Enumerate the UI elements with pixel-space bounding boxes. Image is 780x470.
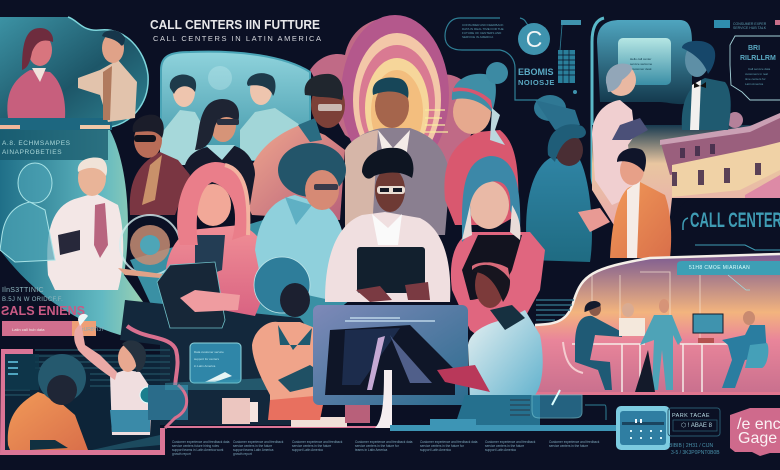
pink label strip: Latin call hub data <box>12 327 45 332</box>
box props <box>222 398 370 427</box>
text: left block: IlnS3TTINIC <box>2 287 44 294</box>
HUD text block: DATA IN REAL TIME FOR THE <box>462 27 504 31</box>
pink label strip <box>2 321 104 336</box>
figure: man left in monitor <box>160 74 205 165</box>
speech bubble <box>618 38 671 85</box>
desk monitor <box>92 385 188 450</box>
figure: seated man right <box>722 311 768 388</box>
figure: woman with glasses in dark suit <box>185 99 255 205</box>
HUD text block: SERVICE IN AMERICA <box>462 35 493 39</box>
figure: orange person <box>8 354 88 450</box>
figure: man right in monitor <box>240 73 300 160</box>
panel: top centre HUD <box>445 18 581 100</box>
column 2: Customer experience and feedback <box>233 440 284 444</box>
HUD grid table <box>558 20 581 94</box>
HUD text block: CONSUMER AND FEEDBACK <box>462 23 504 27</box>
column 4: service centers in the future for <box>355 444 400 448</box>
table right <box>680 344 735 392</box>
HUD label text: EBOMIS <box>518 67 554 77</box>
tablet <box>356 247 430 302</box>
HUD text block: FUTURE OF CENTERS AND <box>462 31 502 35</box>
figure: woman in pink jacket <box>7 28 65 118</box>
figure: blonde woman in pink jacket <box>165 162 270 316</box>
front building <box>672 142 780 198</box>
monitor on right table <box>693 314 723 343</box>
small blue caption: 3-5 / 3K3P0PNT0B0B <box>671 450 720 456</box>
column 1: support teams in Latin America work <box>172 448 224 452</box>
column 1: Customer experience and feedback data <box>172 440 230 444</box>
central monitor back <box>313 305 468 428</box>
table left <box>572 344 645 392</box>
column 6 <box>485 440 536 452</box>
column 3 <box>292 440 343 452</box>
hologram cup <box>532 390 606 420</box>
speech bubble: Hello call center <box>630 57 651 61</box>
panel: left teal gradient <box>0 130 170 340</box>
panel: bottom-left work room <box>0 314 390 455</box>
HUD label text: NOIOSJE <box>518 78 555 87</box>
figure: man in orange jacket <box>610 148 671 258</box>
panel: top right HUD: BRI <box>748 45 760 52</box>
column 1: growth report <box>172 452 191 456</box>
panel: top right HUD: Call service data <box>748 67 771 71</box>
text: left heading: A.8. ECHMSAMPES <box>2 140 71 147</box>
panel: top right HUD: RILRLLRM <box>740 55 776 62</box>
title: CALL CENTERS IIN FUTTURE <box>150 18 320 32</box>
back building <box>660 112 780 175</box>
column 4: Customer experience and feedback data <box>355 440 413 444</box>
column 2: support teams Latin America <box>233 448 274 452</box>
column 6: service centers in the future <box>485 444 524 448</box>
panel: top right HUD: Latin America <box>745 82 764 86</box>
panel: city buildings <box>592 112 780 235</box>
panel: left teal gradient: AINAPROBETIES <box>2 149 62 156</box>
column 1 <box>172 440 230 456</box>
bottom teal line <box>390 419 620 431</box>
figure: man with glasses and peach jacket <box>245 74 345 220</box>
panel: top right HUD: SERVICE HUB TALK <box>733 26 767 30</box>
HUD label text <box>518 67 555 87</box>
pink label strip: rUR8YI3T <box>82 327 104 333</box>
figure: seated man in white shirt <box>619 303 645 336</box>
meeting room label: 51H8 CMOE MIARIAAN <box>689 265 750 271</box>
pink connector <box>165 385 187 428</box>
meeting room label <box>677 261 780 290</box>
figure: man in beige shirt <box>78 30 137 122</box>
panel: lower right strip stripes <box>536 300 574 320</box>
figure: woman in beanie and pink sweater <box>444 62 518 225</box>
figure: man raising arm <box>74 314 156 435</box>
figure: person with bun in blue sweater <box>526 95 610 262</box>
figure: woman with blue hair and black top <box>451 156 545 345</box>
text: left block <box>1 287 85 318</box>
column 7: service centers in the future <box>549 444 588 448</box>
column 7 <box>549 440 600 448</box>
monitor stand <box>375 370 420 428</box>
speech bubble: customer desk <box>632 67 652 71</box>
hologram message box: Data customer service <box>194 350 224 354</box>
column 7: Customer experience and feedback <box>549 440 600 444</box>
text: left block: ƧALS ENIENS <box>1 303 85 318</box>
panel: top right HUD: CONSUMER EXPER <box>733 22 767 26</box>
panel: top right HUD: time centers for <box>745 77 766 81</box>
panel: pink concentric arcs <box>310 15 478 200</box>
panel: central background blue <box>130 200 350 345</box>
figure: man in tuxedo <box>682 41 731 130</box>
ribbon <box>127 326 178 390</box>
panel: central monitor <box>161 52 310 160</box>
pink badge <box>730 408 780 456</box>
panel: top-left meeting <box>0 17 148 130</box>
hand over tablet <box>180 290 240 312</box>
speech bubble: service welcome <box>630 62 653 66</box>
figure: afro person <box>252 257 328 420</box>
device: calendar tablet <box>616 406 670 450</box>
column 5: Customer experience and feedback data <box>420 440 478 444</box>
text: left block: B.5J N W ORIDCF.F. <box>2 297 63 303</box>
column 2: growth report <box>233 452 252 456</box>
pink badge: Gage <box>738 430 777 447</box>
title <box>150 18 321 43</box>
outlined label: ⬡ ! ABAE 8 <box>681 422 713 429</box>
hologram message box: support for centers <box>194 357 220 361</box>
column 6: Customer experience and feedback <box>485 440 536 444</box>
figure: hologram globe <box>118 215 180 278</box>
strip of blocks under the meeting <box>0 118 112 130</box>
icon: C badge: C <box>526 26 542 52</box>
panel: top right HUD <box>714 20 780 100</box>
stripes block <box>510 400 530 415</box>
pink badge: /e enc <box>737 416 780 433</box>
figure: man in white shirt and tie <box>47 158 123 290</box>
figure: central man in grey jacket <box>345 78 450 235</box>
figure: standing woman in teal <box>635 299 682 392</box>
small blue caption <box>669 443 720 456</box>
figure: tablet held by blonde woman <box>157 262 225 328</box>
figure: man in sunglasses with tablet <box>325 148 450 302</box>
outlined label <box>668 408 720 436</box>
bottom text columns <box>172 440 600 456</box>
outlined label: PARK TACAE <box>672 413 710 419</box>
column 6: support Latin America <box>485 448 516 452</box>
HUD text block <box>462 23 504 39</box>
hologram message box <box>190 343 241 383</box>
panel: CALL CENTER label <box>672 198 780 250</box>
column 4 <box>355 440 413 452</box>
central lower background <box>120 300 313 425</box>
figure: man in white-blue coat <box>437 262 543 425</box>
figure: man in sunglasses and maroon jacket <box>130 115 190 215</box>
figure: old woman in pink dress <box>592 64 648 205</box>
figure: seated man <box>563 302 622 390</box>
column 2: service centers in the future <box>233 444 272 448</box>
small blue caption: BIBIB | 2H31 / CIJN <box>669 443 713 449</box>
column 5: service centers in the future for <box>420 444 465 448</box>
panel: right teal with speech bubble <box>592 18 692 210</box>
hologram message box: in Latin America <box>194 364 216 368</box>
column 3: support Latin America <box>292 448 323 452</box>
title: CALL CENTERS IN LATIN AMERICA <box>153 34 321 43</box>
panel: meeting room <box>535 254 780 395</box>
column 2 <box>233 440 284 456</box>
column 3: Customer experience and feedback <box>292 440 343 444</box>
figure: hologram man <box>0 163 55 262</box>
panel: top right HUD: customers in real <box>745 72 768 76</box>
glow strip <box>165 375 330 390</box>
column 3: service centers in the future <box>292 444 331 448</box>
figure: curly haired woman with glasses <box>255 143 346 300</box>
column 4: teams in Latin America <box>355 448 387 452</box>
column 5: support Latin America <box>420 448 451 452</box>
column 1: service centers future hiring roles <box>172 444 219 448</box>
column 5 <box>420 440 478 452</box>
